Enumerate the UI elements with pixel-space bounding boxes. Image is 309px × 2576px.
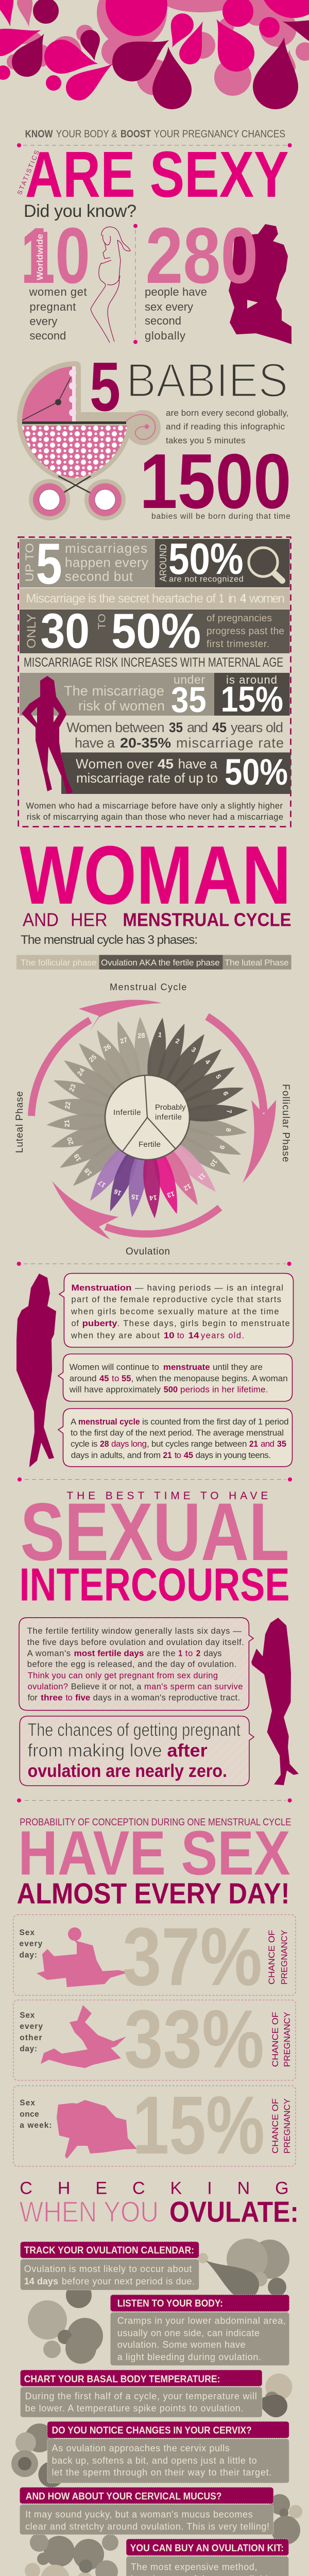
day numbers: 16 (113, 1188, 123, 1197)
row: 1 in 4 women: women (249, 591, 285, 606)
row: 35 to 45: 45 (212, 720, 227, 735)
bubble: menopause: Women will continue to (70, 1362, 159, 1372)
bubble: menopause: 500 (164, 1384, 178, 1394)
day numbers: 7 (225, 1109, 233, 1113)
rotated label: statistics: STATISTICS (16, 149, 41, 196)
row: around 50%: are not recognized (169, 575, 244, 584)
day numbers: 28 (138, 1031, 145, 1040)
icon: couple (41, 2005, 126, 2068)
bubble: fertility window: before the egg is released, and the day of ovulation. (27, 1660, 236, 1669)
icon: couple silhouette (229, 224, 291, 344)
decorative blobs: ovulation tips (11, 2239, 302, 2576)
panel: sex every day 37%: every (20, 1939, 43, 1948)
row: 1 in 4 women (20, 588, 290, 609)
subtitle: KNOW (25, 128, 53, 140)
day numbers: 27 (119, 1036, 128, 1045)
bubble: cycle length (58, 1409, 293, 1467)
tip: listen to body: Cramps in your lower abdominal area, (117, 2316, 286, 2326)
row: only 30 to 50%: 50% (111, 603, 201, 658)
bubble: menstruation (59, 1274, 294, 1347)
row: 35 to 45: years old (231, 720, 283, 735)
icon: woman silhouette (251, 1618, 299, 1785)
bubble: after ovulation: after (167, 1741, 208, 1761)
row: 1 in 4 women: 4 (240, 591, 247, 606)
bubble: menopause (58, 1354, 293, 1401)
bubble: menopause: until they are (213, 1362, 263, 1372)
row: under 35 (20, 673, 290, 720)
tip: mucus: clear and stretchy around ovulation. This is very telling! (25, 2521, 269, 2532)
subtitle: BOOST (121, 128, 151, 140)
row: 1 in 4 women: in (228, 591, 236, 606)
tip: listen to body: a light bleeding during ovulation. (117, 2352, 261, 2362)
centre circle: Probably (155, 1103, 186, 1112)
bubble: fertility window: ovulation? (28, 1682, 68, 1691)
subtitle: and her menstrual cycle: MENSTRUAL CYCLE (123, 909, 291, 930)
tip: ovulation kit: The most expensive method, (131, 2562, 257, 2572)
panel: every other day 33%: 33% (124, 1993, 264, 2085)
day numbers: 8 (225, 1127, 233, 1132)
row: around 50%: 50% (168, 535, 244, 584)
tip: calendar: Ovulation is most likely to occur about (24, 2264, 192, 2274)
day numbers: 9 (218, 1144, 227, 1150)
tip: cervix: DO YOU NOTICE CHANGES IN YOUR CERVIX? (52, 2425, 252, 2436)
day numbers: 1 (158, 1030, 162, 1039)
row: 35 to 45: 20-35% (120, 735, 171, 751)
tip: mucus (20, 2487, 273, 2535)
text: babies explanation: takes you 5 minutes (166, 436, 245, 446)
tip: calendar: before your next period is due. (62, 2276, 195, 2286)
row: only 30 to 50%: progress past the (207, 626, 284, 637)
day numbers: 25 (87, 1053, 98, 1063)
bubble: menstruation: puberty (82, 1319, 118, 1328)
stat: 10 women: 10 (20, 211, 90, 300)
bubble: menstruation: years old. (201, 1331, 244, 1341)
day numbers: 3 (190, 1045, 197, 1054)
row: only 30 to 50% (20, 603, 290, 658)
row: 1 in 4 women: Miscarriage is the secret heartache of (26, 591, 216, 606)
stat: 10 women: women get (29, 285, 87, 298)
bubble: menstruation: 10 (164, 1331, 175, 1341)
centre circle: Fertile (139, 1140, 161, 1149)
bubble: fertility window: days (203, 1649, 221, 1658)
bubble: menstruation: part of the female reproductive cycle that starts (71, 1295, 281, 1304)
heading: best time: THE BEST TIME TO HAVE (66, 1490, 268, 1502)
row: under 35: The miscarriage (64, 683, 164, 699)
day numbers: 18 (83, 1167, 93, 1178)
row: 35 to 45: and (187, 720, 208, 735)
text: three phases: The menstrual cycle has 3 phases: (21, 933, 198, 947)
row: up to 5 miscarriages (20, 532, 155, 596)
row: up to 5 miscarriages: happen every (65, 555, 148, 570)
bubble: cycle length: days long (111, 1439, 147, 1449)
tip: calendar: 14 days (24, 2276, 58, 2286)
row: over 45: 50% (225, 752, 288, 793)
bubble: menopause: will have approximately (69, 1384, 161, 1394)
tip: mucus: AND HOW ABOUT YOUR CERVICAL MUCUS? (26, 2491, 222, 2502)
tip: cervix: As ovulation approaches the cervix pulls (52, 2443, 230, 2453)
row: 35 to 45: miscarriage rate (176, 735, 284, 751)
subtitle: YOUR BODY & (56, 128, 117, 140)
day numbers: 15 (131, 1193, 140, 1201)
bubble: cycle length: days in young teens. (196, 1450, 271, 1460)
row: around 50%: AROUND (158, 544, 168, 582)
tip: ovulation kit: YOU CAN BUY AN OVULATION KIT: (130, 2543, 284, 2554)
row: only 30 to 50%: of pregnancies (207, 613, 272, 624)
bubble: cycle length: 21 (249, 1439, 258, 1449)
bubble: menstruation: when girls become sexually mature at the time (71, 1307, 279, 1316)
panel: sex every day 37%: day: (20, 1951, 37, 1959)
panel: every other day 33%: Sex (20, 2011, 35, 2020)
text: babies explanation: and if reading this infographic (166, 422, 285, 432)
row: up to 5 miscarriages: 5 (36, 532, 62, 596)
row: under 35: is around (226, 673, 277, 686)
bubble: after ovulation: ovulation are nearly zero. (28, 1761, 227, 1781)
bubble: menstruation: — having periods — is an integral (135, 1283, 283, 1293)
bubble: cycle length: to (175, 1450, 181, 1460)
phases bar: Ovulation AKA the fertile phase (101, 958, 220, 968)
heading: 5 babies: BABIES (126, 353, 288, 407)
tip: listen to body: usually on one side, can indicate (117, 2328, 260, 2338)
row: under 35: under (174, 673, 205, 686)
bubble: fertility window: most fertile days (74, 1649, 144, 1658)
bubble: fertility window: Think you can only get pregnant from sex during (28, 1671, 218, 1681)
stat: 1500 babies: babies will be born during that time (151, 512, 290, 521)
icon: woman silhouette (16, 1274, 56, 1467)
tip: listen to body: ovulation. Some women have (117, 2340, 245, 2350)
day numbers: 2 (175, 1037, 181, 1045)
centre circle: Infertile (113, 1108, 141, 1117)
day numbers: 12 (182, 1182, 193, 1193)
bubble: menopause: menstruate (163, 1362, 210, 1372)
day numbers: 14 (149, 1194, 157, 1202)
heading: checking: CHECKING (20, 2179, 289, 2198)
row: only 30 to 50%: TO (97, 614, 108, 630)
tip: basal temperature (20, 2370, 262, 2417)
phases bar: The luteal Phase (225, 958, 289, 968)
divider (18, 1478, 292, 1482)
panel: every other day 33%: day: (20, 2045, 37, 2054)
day numbers: 24 (76, 1066, 87, 1077)
bubble: fertility window: to (185, 1649, 193, 1658)
panel: once a week 15%: 15% (132, 2079, 265, 2171)
day numbers (63, 1030, 233, 1202)
bubble: after ovulation (20, 1716, 254, 1786)
note: previous miscarriage: Women who had a miscarriage before have only a slightly higher (26, 802, 283, 811)
panel: once a week 15%: CHANCE OF (270, 2098, 280, 2154)
bubble: menstruation: . These days, girls begin to menstruate (117, 1319, 290, 1328)
bubble: fertility window: are the (147, 1649, 176, 1658)
day numbers: 19 (72, 1153, 82, 1163)
phase labels (14, 1084, 291, 1257)
row: 1 in 4 women: 1 (219, 591, 224, 606)
centre circle: infertile (155, 1113, 182, 1122)
day numbers: 4 (203, 1058, 212, 1066)
text: babies explanation: are born every second globally, (166, 408, 289, 418)
bubble: cycle length: 45 (184, 1450, 193, 1460)
bubble: menopause: 55 (122, 1374, 131, 1383)
bubble: cycle length: cycle is (71, 1439, 97, 1449)
bubble: cycle length: 21 (163, 1450, 172, 1460)
panel: every other day 33%: every (20, 2022, 43, 2031)
heading: 5 babies (90, 348, 288, 426)
stat: 280 people: globally (145, 329, 185, 342)
panel: every other day 33%: other (20, 2033, 42, 2042)
stat: 10 women: pregnant (29, 300, 76, 313)
phases bar: The follicular phase (21, 958, 97, 968)
bubble: cycle length: A (71, 1417, 77, 1427)
bubble: fertility window: The fertile fertility window generally lasts six days — (27, 1626, 242, 1636)
bubble: fertility window: to (65, 1693, 73, 1703)
bubble: fertility window: Believe it or not, a (71, 1682, 142, 1691)
panel: once a week 15%: Sex (20, 2099, 35, 2108)
bubble: cycle length: to the first day of the next period. The average menstrual (71, 1428, 284, 1438)
panel: once a week 15%: once (20, 2110, 39, 2119)
vertical divider (133, 224, 138, 344)
day numbers: 21 (63, 1120, 71, 1127)
bubble: after ovulation: from making love (28, 1741, 162, 1761)
bubble: cycle length: 28 (100, 1439, 109, 1449)
tip: calendar: TRACK YOUR OVULATION CALENDAR: (24, 2245, 194, 2256)
row: 35 to 45: 35 (169, 720, 183, 735)
bubble: cycle length: , but cycles range between (147, 1439, 247, 1449)
stat: 10 women (20, 211, 90, 342)
row: 35 to 45 (66, 720, 284, 751)
panel: sex every day 37%: CHANCE OF (267, 1930, 277, 1985)
row: only 30 to 50%: ONLY (25, 614, 39, 649)
title: when you ovulate: WHEN YOU (20, 2196, 159, 2229)
row: up to 5 miscarriages: UP TO (23, 543, 36, 582)
panel: once a week 15%: PREGNANCY (282, 2098, 292, 2154)
stat: 10 women: every (29, 315, 57, 328)
centre circle (105, 1075, 190, 1160)
subtitle: and her menstrual cycle: AND (23, 909, 59, 930)
row: over 45: 45 (158, 756, 174, 772)
icon: couple (37, 1927, 129, 1987)
bubble: menstruation: to (177, 1331, 184, 1341)
tip: basal temperature: During the first half of a cycle, your temperature will (25, 2391, 257, 2401)
tip: cervix (47, 2421, 289, 2483)
decorative drops header (0, 0, 309, 113)
title: when you ovulate (20, 2196, 299, 2229)
day numbers: 20 (65, 1137, 75, 1146)
chart title: Menstrual Cycle (110, 982, 186, 992)
subtitle: and her menstrual cycle: HER (71, 909, 108, 930)
subtitle (25, 128, 285, 140)
panel: miscarriage (19, 532, 291, 827)
tip: basal temperature: be lower. A temperature spike points to ovulation. (25, 2403, 244, 2414)
subtitle: YOUR PREGNANCY CHANCES (153, 128, 285, 140)
row: around 50% (155, 535, 290, 587)
day numbers: 26 (102, 1042, 112, 1053)
stat: 280 people (145, 211, 258, 342)
row: 35 to 45: Women between (66, 720, 165, 735)
phase labels: Ovulation (126, 1246, 170, 1257)
panel: sex every day 37%: Sex (20, 1928, 35, 1937)
bubble: menopause: to (112, 1374, 119, 1383)
bubble: menstruation: when they are about (71, 1331, 160, 1341)
bubble: fertility window: 1 (178, 1649, 182, 1658)
stat: 10 women: second (29, 329, 66, 342)
bubble: fertility window: the five days before ovulation and ovulation day itself. (27, 1638, 244, 1647)
row: under 35: 15% (221, 679, 283, 719)
day numbers: 10 (209, 1158, 219, 1168)
tip: listen to body: LISTEN TO YOUR BODY: (117, 2298, 223, 2309)
bubble: cycle length: 35 (277, 1439, 286, 1449)
icon: woman silhouette (22, 676, 73, 794)
panel: once a week 15% (13, 2079, 296, 2171)
panel: every other day 33% (13, 1993, 296, 2085)
row: up to 5 miscarriages: second but (65, 569, 133, 584)
phase labels: Follicular Phase (280, 1084, 291, 1162)
petals (46, 1016, 249, 1219)
tip: calendar (20, 2242, 199, 2290)
arrow: follicular (207, 1016, 276, 1183)
arrow: luteal (31, 1000, 162, 1116)
row: under 35: risk of women (78, 698, 165, 714)
divider (17, 1262, 291, 1266)
panel: every other day 33%: CHANCE OF (270, 2012, 280, 2067)
text: babies explanation (166, 408, 289, 446)
bubble: fertility window: man's sperm can survive (144, 1682, 243, 1691)
day numbers: 13 (166, 1190, 176, 1199)
row: only 30 to 50%: 30 (40, 603, 90, 658)
tip: cervix: let the sperm through on their way to their target. (52, 2467, 271, 2478)
arrow: ovulation (52, 1181, 220, 1240)
panel: once a week 15%: a week: (20, 2121, 52, 2130)
panel: sex every day 37% (13, 1910, 296, 2003)
heading: 5 babies: 5 (90, 348, 121, 426)
panel: every other day 33%: PREGNANCY (282, 2012, 292, 2067)
bubble: cycle length: days in adults, and from (71, 1450, 161, 1460)
panel: sex every day 37%: 37% (123, 1910, 262, 2003)
bubble: fertility window: A woman's (27, 1649, 71, 1658)
bubble: fertility window: five (75, 1693, 90, 1703)
bubble: cycle length: menstrual cycle (78, 1417, 140, 1427)
stat: 280 people: 280 (145, 211, 258, 300)
stat: 280 people: sex every (145, 300, 193, 313)
row: up to 5 miscarriages: miscarriages (65, 540, 147, 556)
bubble: menopause: around (70, 1374, 97, 1383)
day numbers: 6 (221, 1091, 230, 1096)
subtitle: and her menstrual cycle (23, 909, 291, 930)
bubble: cycle length: and (261, 1439, 274, 1449)
tip: cervix: back up, softens a bit, and opens just a little to (52, 2455, 257, 2466)
row: over 45: miscarriage rate of up to (76, 770, 218, 786)
divider (17, 143, 292, 147)
icon: baby stroller (22, 366, 161, 520)
chart: menstrual cycle wheel (14, 1000, 291, 1257)
tip: basal temperature: CHART YOUR BASAL BODY TEMPERATURE: (24, 2374, 220, 2385)
bubble: menopause: , when the menopause begins. A woman (131, 1374, 288, 1383)
row: over 45 (61, 752, 290, 794)
panel: sex every day 37%: PREGNANCY (280, 1930, 289, 1985)
day numbers: 23 (67, 1083, 77, 1093)
day numbers: 22 (63, 1101, 72, 1110)
bubble: cycle length: is counted from the first day of 1 period (142, 1417, 289, 1427)
bubble: menopause: periods in her lifetime. (180, 1384, 268, 1394)
heading: did you know: Did you know? (24, 201, 136, 221)
bubble: menstruation: of (71, 1319, 79, 1328)
stat: 1500 babies: 1500 (140, 437, 291, 524)
row: only 30 to 50%: first trimester. (207, 639, 269, 650)
divider (17, 1799, 292, 1803)
note: previous miscarriage: risk of miscarrying again than those who never had a miscarriage (27, 812, 283, 822)
row: 35 to 45: have a (75, 735, 115, 751)
stat: 280 people: people have (145, 285, 207, 298)
tip: ovulation kit (126, 2539, 289, 2576)
bubble: fertility window (19, 1618, 253, 1710)
bubble: menstruation: Menstruation (71, 1283, 132, 1293)
bubble: menstruation: 14 (188, 1331, 199, 1341)
bubble: menopause: 45 (99, 1374, 109, 1383)
bubble: fertility window: for (28, 1693, 38, 1703)
bubble: fertility window: 2 (196, 1649, 200, 1658)
phase labels: Luteal Phase (14, 1091, 25, 1153)
row: over 45: have a (178, 756, 218, 772)
bubble: fertility window: days in a woman's reproductive tract. (93, 1693, 240, 1703)
tip: listen to body (110, 2295, 289, 2366)
stat: 280 people: second (145, 314, 181, 327)
icon: couple (57, 2100, 137, 2159)
day numbers: 17 (96, 1179, 107, 1189)
day numbers: 5 (214, 1073, 223, 1080)
phases bar (16, 955, 291, 970)
row: over 45: Women over (76, 756, 153, 772)
tip: mucus: It may sound yucky, but a woman's mucus becomes (25, 2510, 253, 2520)
bubble: after ovulation: The chances of getting pregnant (28, 1720, 241, 1740)
icon: pregnant woman outline (91, 227, 130, 343)
day numbers: 11 (197, 1172, 207, 1182)
bubble: fertility window: three (41, 1693, 63, 1703)
note: previous miscarriage (26, 802, 283, 822)
stat: 10 women: Worldwide (35, 234, 45, 280)
row: under 35: 35 (171, 680, 207, 720)
